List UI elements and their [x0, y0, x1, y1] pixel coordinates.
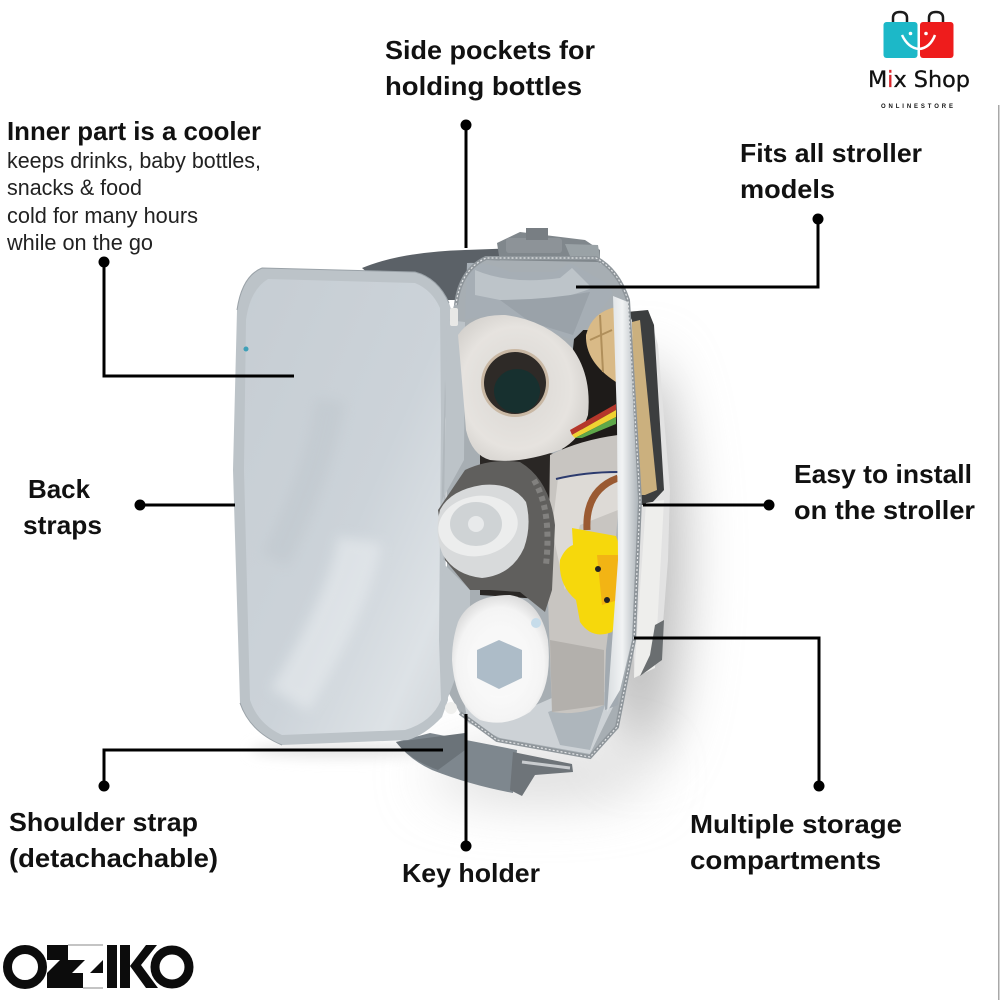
- lower inner lining: [462, 640, 613, 754]
- buckle: [510, 752, 573, 796]
- callout: easy to install: [643, 459, 975, 525]
- callout: inner part is a cooler: snacks & food: [7, 175, 142, 200]
- dark interior gap: [560, 330, 620, 480]
- upper silver pocket: [465, 263, 613, 340]
- callout: multiple storage compartments: compartments: [690, 845, 881, 875]
- top handle loop: [497, 228, 600, 268]
- product photo: open cooler bag: [233, 228, 670, 796]
- shoulder strap bottom: [396, 733, 517, 793]
- front silver rim: [607, 296, 638, 712]
- callout: side pockets: [385, 35, 595, 248]
- callout: inner part is a cooler: Inner part is a cooler: [7, 116, 261, 146]
- callout: easy to install: Easy to install: [794, 459, 972, 489]
- left inner lining strip: [440, 320, 470, 700]
- rainbow ribbon: [570, 404, 616, 438]
- yellow rubber duck: [560, 528, 621, 634]
- callout: fits all stroller models: models: [740, 174, 835, 204]
- towel: [548, 435, 618, 713]
- callout: fits all stroller models: Fits all stroller: [740, 138, 922, 168]
- callout: key holder: [402, 714, 540, 888]
- back strap top: [362, 248, 520, 300]
- callout: side pockets: Side pockets for: [385, 35, 595, 65]
- callout: shoulder strap: Shoulder strap: [9, 807, 198, 837]
- bag body interior: [440, 260, 640, 757]
- callout: inner part is a cooler: while on the go: [6, 230, 153, 255]
- white pump container: [452, 595, 549, 723]
- callout: inner part is a cooler: keeps drinks, baby bottles,: [7, 148, 261, 173]
- callout: back straps: straps: [23, 510, 102, 540]
- baby bottle: [433, 485, 529, 578]
- logo: Mix Shop: Mix Shop: [868, 68, 970, 93]
- callout: back straps: [23, 474, 235, 540]
- wooden toy: [586, 307, 616, 382]
- zipper pulls: [445, 308, 458, 714]
- lid insulated panel: [233, 268, 458, 745]
- right outer book pocket: [625, 310, 670, 678]
- callout: side pockets: holding bottles: [385, 71, 582, 101]
- callout: shoulder strap: (detachachable): [9, 843, 218, 873]
- icon: shopping bags: [884, 12, 954, 58]
- dark pouch: [438, 461, 555, 612]
- callout: inner part is a cooler: cold for many hours: [7, 203, 198, 228]
- callout: shoulder strap: [9, 750, 443, 873]
- logo: Mix Shop: ONLINESTORE: [881, 104, 953, 110]
- logo: Mix Shop: [868, 12, 970, 110]
- callout: key holder: Key holder: [402, 858, 540, 888]
- callout: inner part is a cooler: [6, 116, 294, 376]
- callout: easy to install: on the stroller: [794, 495, 975, 525]
- callout: fits all stroller models: [576, 138, 922, 287]
- zipper: [456, 258, 640, 757]
- callout: multiple storage compartments: [634, 638, 902, 875]
- toilet roll: [458, 315, 589, 461]
- callout: back straps: Back: [28, 474, 91, 504]
- logo: Ozziko: [8, 945, 189, 988]
- callout: multiple storage compartments: Multiple storage: [690, 809, 902, 839]
